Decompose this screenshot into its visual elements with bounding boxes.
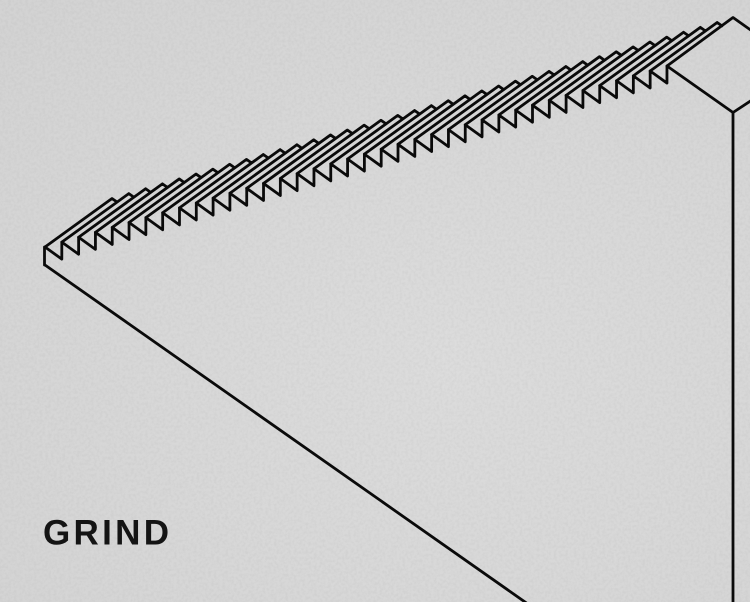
stepped ridge lines behind teeth [45,22,722,247]
vertical edge [732,112,734,602]
left edge of block [43,247,46,265]
title: GRIND: GRIND [43,514,169,552]
long diagonal edge [45,265,527,602]
cube at top right [667,18,750,112]
sawtooth grinding teeth [45,66,667,259]
